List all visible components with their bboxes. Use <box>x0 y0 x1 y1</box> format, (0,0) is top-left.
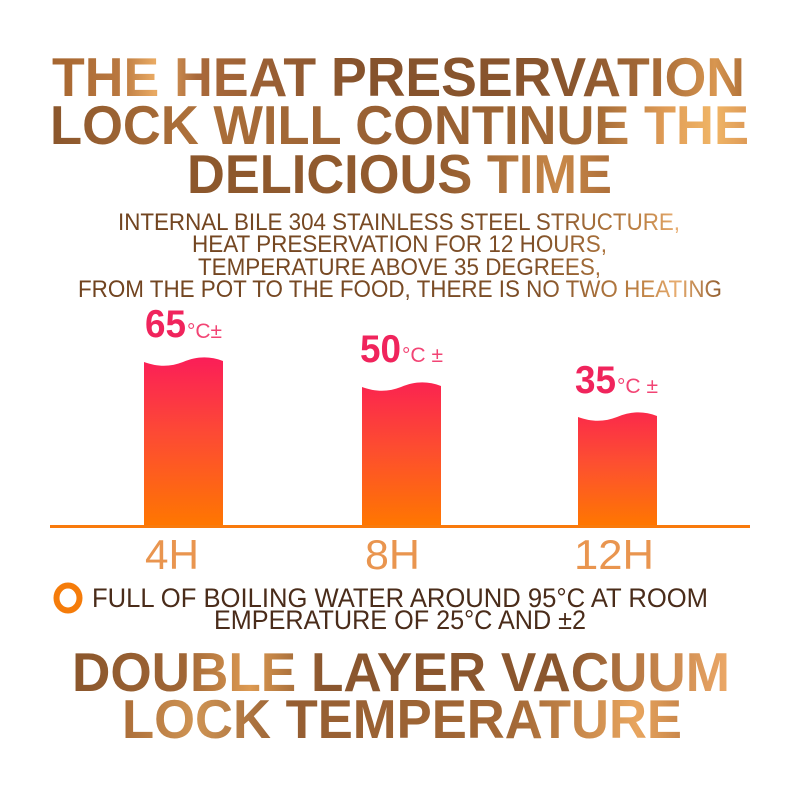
axis labels <box>145 531 654 578</box>
bar chart: temperature over time <box>50 303 750 578</box>
note text <box>92 583 708 635</box>
value label: 35: 35 <box>575 359 616 402</box>
value label: 35 <box>575 359 658 402</box>
title: heat preservation lock: THE HEAT PRESERVATION <box>52 46 745 108</box>
bottom title: double layer vacuum <box>72 641 730 750</box>
bar: 12H 35 degrees <box>578 412 657 526</box>
axis labels: 12H <box>574 531 654 578</box>
value label: 65: °C± <box>187 320 222 343</box>
description text block: HEAT PRESERVATION FOR 12 HOURS, <box>192 231 607 258</box>
value label: 65 <box>145 303 222 346</box>
title: heat preservation lock: LOCK WILL CONTINUE THE <box>50 94 749 156</box>
bar: 4H 65 degrees <box>144 357 223 526</box>
axis line <box>50 525 750 528</box>
note text: EMPERATURE OF 25°C AND ±2 <box>214 605 586 635</box>
description text block <box>78 209 722 303</box>
value label: 65: 65 <box>145 303 186 346</box>
bar: 8H 50 degrees <box>362 382 441 526</box>
value label: 50: °C ± <box>402 344 443 367</box>
icon: orange ring <box>56 586 80 610</box>
note text: FULL OF BOILING WATER AROUND 95°C AT ROOM <box>92 583 708 613</box>
title: heat preservation lock <box>50 46 749 205</box>
value label: 50: 50 <box>360 328 401 371</box>
description text block: FROM THE POT TO THE FOOD, THERE IS NO TWO HEATING <box>78 276 722 303</box>
value label: 35: °C ± <box>617 375 658 398</box>
axis labels: 8H <box>365 531 420 578</box>
value label: 50 <box>360 328 443 371</box>
axis labels: 4H <box>145 531 199 578</box>
description text block: TEMPERATURE ABOVE 35 DEGREES, <box>198 254 601 281</box>
description text block: INTERNAL BILE 304 STAINLESS STEEL STRUCTURE, <box>118 209 680 236</box>
title: heat preservation lock: DELICIOUS TIME <box>187 143 612 205</box>
bottom title: double layer vacuum: LOCK TEMPERATURE <box>122 688 682 750</box>
bottom title: double layer vacuum: DOUBLE LAYER VACUUM <box>72 641 730 703</box>
